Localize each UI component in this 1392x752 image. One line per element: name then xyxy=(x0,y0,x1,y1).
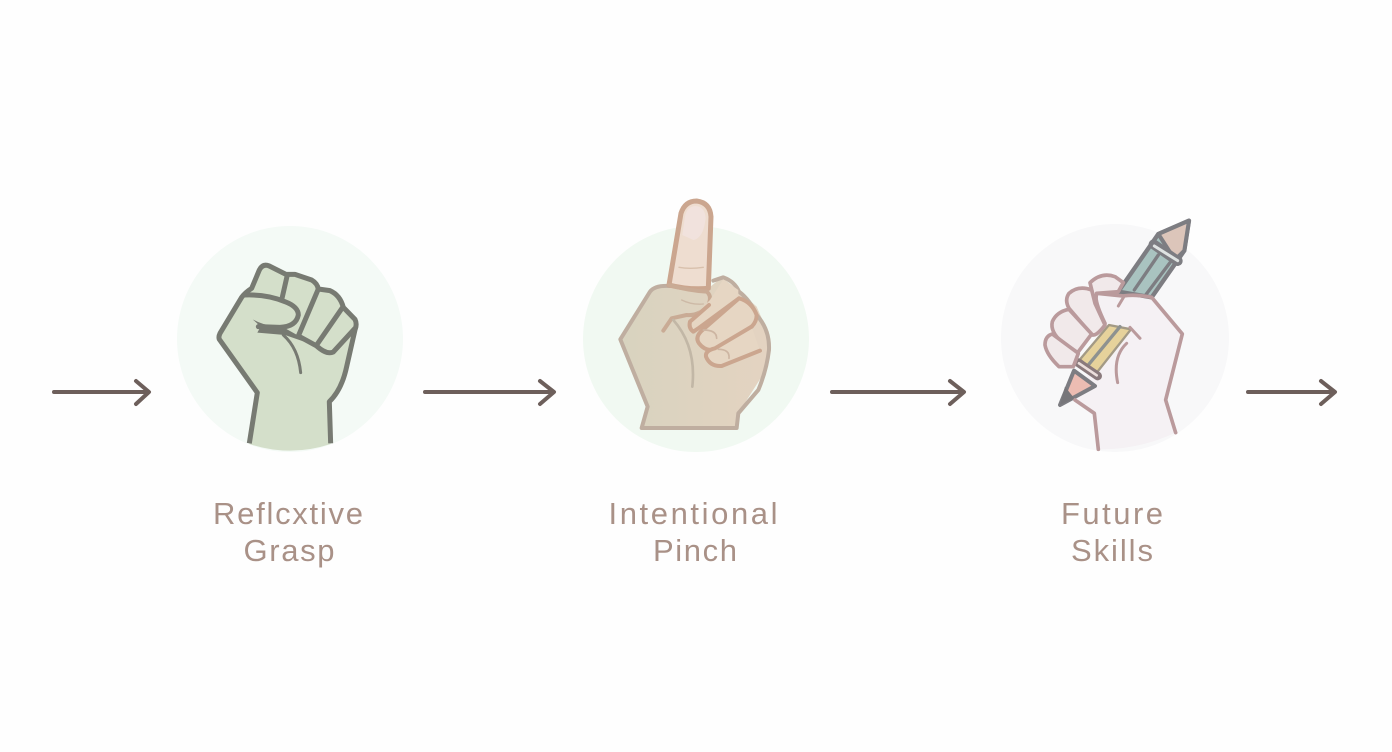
label: Future Skills: Future xyxy=(1061,496,1163,531)
step 2: intentional pinch xyxy=(583,201,809,452)
arrow 3 xyxy=(832,381,964,404)
arrow 2 xyxy=(425,381,554,404)
label: Reflcxtive Grasp: Reflcxtive xyxy=(213,496,363,531)
circle background 1 xyxy=(177,226,403,452)
icon: fist xyxy=(219,265,356,451)
circle background 2 xyxy=(583,226,809,452)
icon: pointing hand xyxy=(620,201,769,428)
icon: hand holding pencil xyxy=(1045,221,1189,449)
step 3: future skills xyxy=(1001,221,1229,452)
label: Future Skills xyxy=(1061,496,1163,568)
arrow 4 xyxy=(1248,381,1335,404)
label: Intentional Pinch: Pinch xyxy=(653,533,737,568)
label: Intentional Pinch: Intentional xyxy=(608,496,778,531)
pencil top xyxy=(1118,221,1189,297)
label: Reflcxtive Grasp: Grasp xyxy=(244,533,334,568)
label: Future Skills: Skills xyxy=(1071,533,1153,568)
arrow 1 xyxy=(54,381,149,404)
palm fill xyxy=(1075,293,1182,449)
circle background 3 xyxy=(1001,224,1229,452)
step 1: reflexive grasp xyxy=(177,226,403,452)
label: Reflcxtive Grasp xyxy=(213,496,363,568)
pencil bottom xyxy=(1060,325,1131,405)
fingers xyxy=(1090,275,1123,303)
label: Intentional Pinch xyxy=(608,496,778,568)
